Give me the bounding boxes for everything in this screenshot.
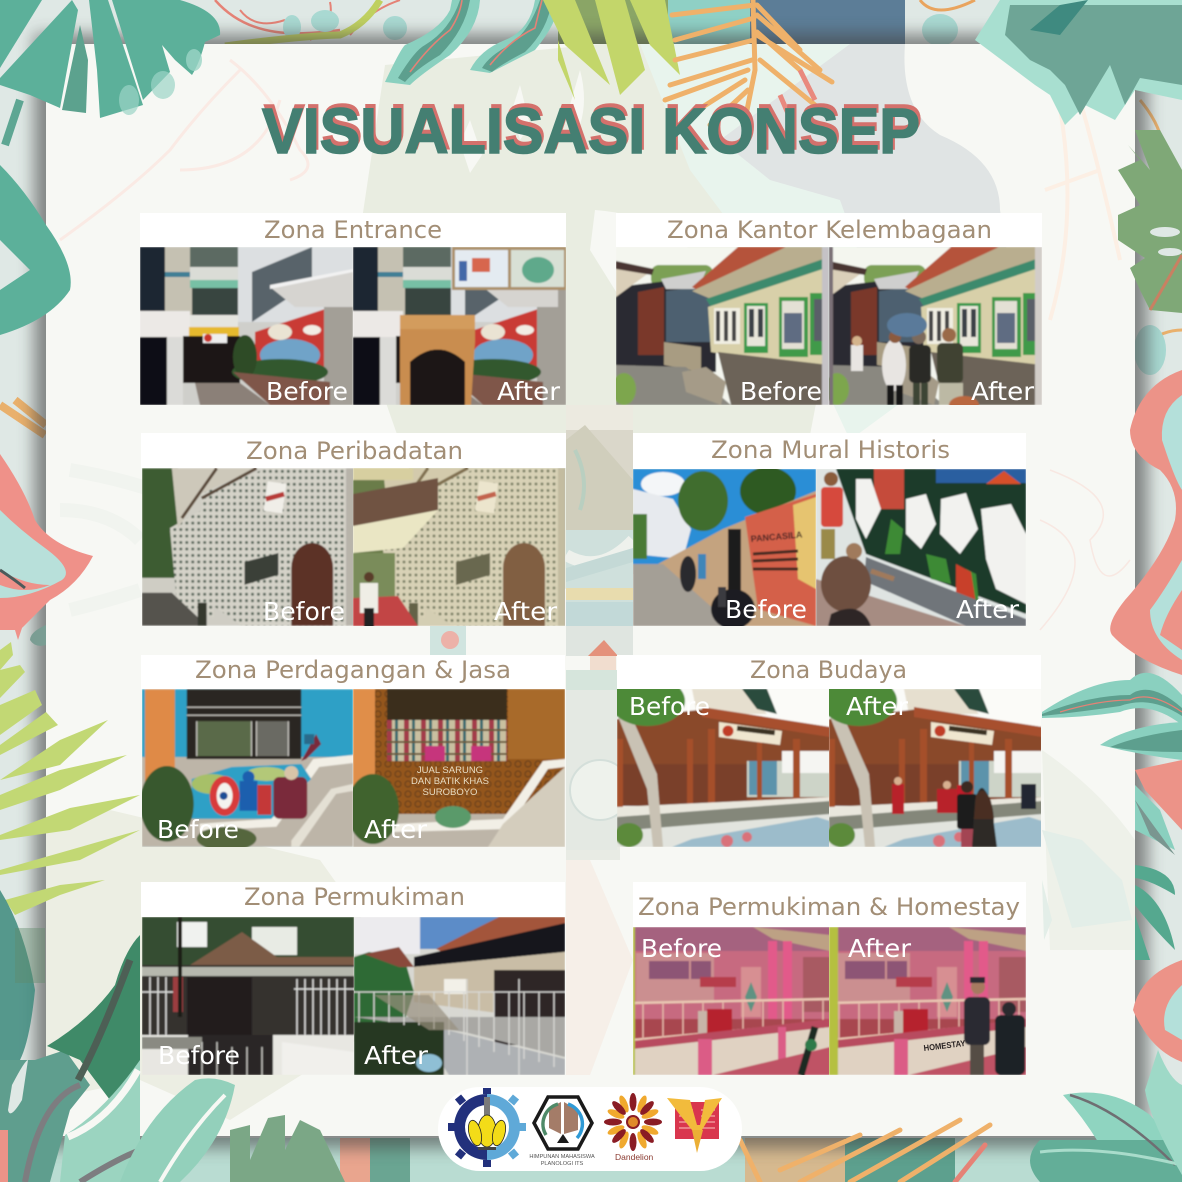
- logo: Himpunan Mahasiswa Planologi ITS: [529, 1097, 595, 1167]
- heading: Zona Entrance: Zona Entrance: [264, 216, 442, 244]
- logo: Himpunan Mahasiswa Planologi ITS: PLANOLOGI ITS: [541, 1161, 584, 1167]
- logo: red book and pen: [667, 1098, 722, 1153]
- label: before: Before: [157, 815, 239, 844]
- photo: entrance before: [140, 247, 353, 405]
- panel: Zona Perdagangan & Jasa: [140, 655, 565, 851]
- label: after: After: [848, 934, 912, 963]
- label: after: After: [364, 1041, 429, 1070]
- photo: mural after: [816, 469, 1026, 626]
- photo: entrance after: [353, 247, 566, 405]
- photo: permukiman before: [142, 917, 354, 1075]
- heading: Zona Kantor Kelembagaan: Zona Kantor Kelembagaan: [667, 216, 992, 244]
- logo strip: [438, 1087, 742, 1171]
- label: after: After: [497, 377, 561, 406]
- panel: Zona Kantor Kelembagaan: [612, 213, 1042, 414]
- photo: peribadatan before: [142, 468, 353, 626]
- label: before: Before: [629, 692, 710, 721]
- foreground: top-right leaf: [975, 0, 1182, 125]
- photo: perdagangan before: [142, 689, 353, 847]
- panel: Zona Budaya: [609, 655, 1042, 847]
- foreground: bottom leaves: [120, 1078, 345, 1182]
- central castle illustration: [430, 405, 633, 850]
- photo: homestay before: [633, 927, 829, 1075]
- heading: Zona Mural Historis: Zona Mural Historis: [711, 436, 950, 464]
- heading: Zona Permukiman & Homestay: Zona Permukiman & Homestay: [638, 893, 1020, 921]
- foreground: top palm and lime blades: [543, 0, 832, 125]
- photo: kantor after: [829, 247, 1042, 405]
- foreground: bottom orange fronds: [740, 1120, 990, 1182]
- foreground: right green monstera: [1118, 127, 1182, 313]
- label: after: After: [971, 377, 1035, 406]
- heading: Zona Budaya: Zona Budaya: [750, 656, 907, 684]
- foreground: right coral and teal waves: [1042, 370, 1182, 1062]
- label: before: Before: [725, 595, 807, 624]
- foreground: left upper leaf: [0, 165, 71, 335]
- label: before: Before: [158, 1041, 240, 1070]
- heading: Zona Peribadatan: Zona Peribadatan: [246, 437, 463, 465]
- photo: mural before: PANCASILA: [750, 529, 803, 544]
- batik sign text: SUROBOYO: [423, 787, 477, 798]
- foreground: bottom-right leaf: [1030, 1050, 1182, 1182]
- photo: perdagangan after: [353, 689, 565, 847]
- panel: Zona Permukiman: [141, 882, 565, 1075]
- batik sign text: [411, 765, 489, 798]
- photo: budaya after: [829, 689, 1041, 847]
- batik sign text: DAN BATIK KHAS: [411, 776, 489, 787]
- label: before: Before: [263, 597, 345, 626]
- logo: Dandelion: Dandelion: [615, 1152, 654, 1162]
- foreground: top-left monstera leaf: [0, 0, 220, 118]
- panel: Zona Mural Historis: [633, 433, 1026, 629]
- foreground: lime fern fronds: [0, 642, 140, 915]
- foreground: bottom-left dark leaves: [0, 890, 140, 1182]
- title: VISUALISASI KONSEP: [264, 91, 922, 163]
- logo: Dandelion: [604, 1093, 662, 1162]
- panel: Zona Permukiman & Homestay: [633, 882, 1026, 1075]
- label: before: Before: [641, 934, 722, 963]
- heading: Zona Permukiman: Zona Permukiman: [244, 883, 465, 911]
- label: before: Before: [740, 377, 822, 406]
- label: after: After: [956, 595, 1020, 624]
- photo: peribadatan after: [353, 468, 565, 626]
- photo: mural before: [633, 469, 816, 626]
- heading: Zona Perdagangan & Jasa: Zona Perdagangan & Jasa: [195, 656, 511, 684]
- logo: Himpunan Mahasiswa Planologi ITS: HIMPUNAN MAHASISWA: [529, 1154, 595, 1160]
- batik sign text: JUAL SARUNG: [417, 765, 483, 776]
- photo: kantor before: [616, 247, 829, 405]
- panel: Zona Peribadatan: [141, 433, 566, 630]
- label: before: Before: [266, 377, 348, 406]
- photo: permukiman after: [354, 917, 565, 1075]
- photo: homestay after: [829, 927, 1026, 1075]
- foreground: left coral leaf: [0, 454, 93, 646]
- foreground: left stem: [5, 100, 20, 145]
- label: after: After: [846, 692, 909, 721]
- photo: budaya before: [617, 689, 829, 847]
- sign: homestay: HOMESTAY: [923, 1038, 966, 1053]
- logo: ITS gear: [448, 1088, 526, 1167]
- panel: Zona Entrance: [140, 213, 566, 406]
- label: after: After: [494, 597, 558, 626]
- title: VISUALISASI KONSEP: [262, 95, 920, 167]
- foreground: hanging wavy ferns: [385, 0, 558, 85]
- label: after: After: [364, 815, 428, 844]
